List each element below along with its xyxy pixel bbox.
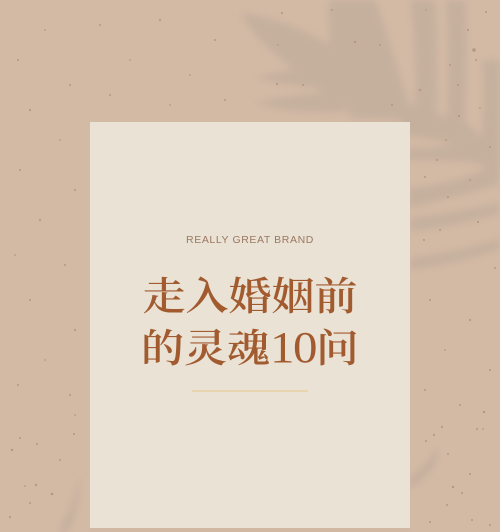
title: 的灵魂10问 xyxy=(141,318,359,374)
panel: cream card xyxy=(90,122,410,528)
palm shadow: bottom xyxy=(58,447,438,532)
brand name: REALLY GREAT BRAND xyxy=(186,234,314,246)
title xyxy=(141,266,359,374)
title: 走入婚姻前 xyxy=(142,266,358,322)
divider line xyxy=(192,390,308,392)
palm shadow: top right xyxy=(240,0,500,270)
